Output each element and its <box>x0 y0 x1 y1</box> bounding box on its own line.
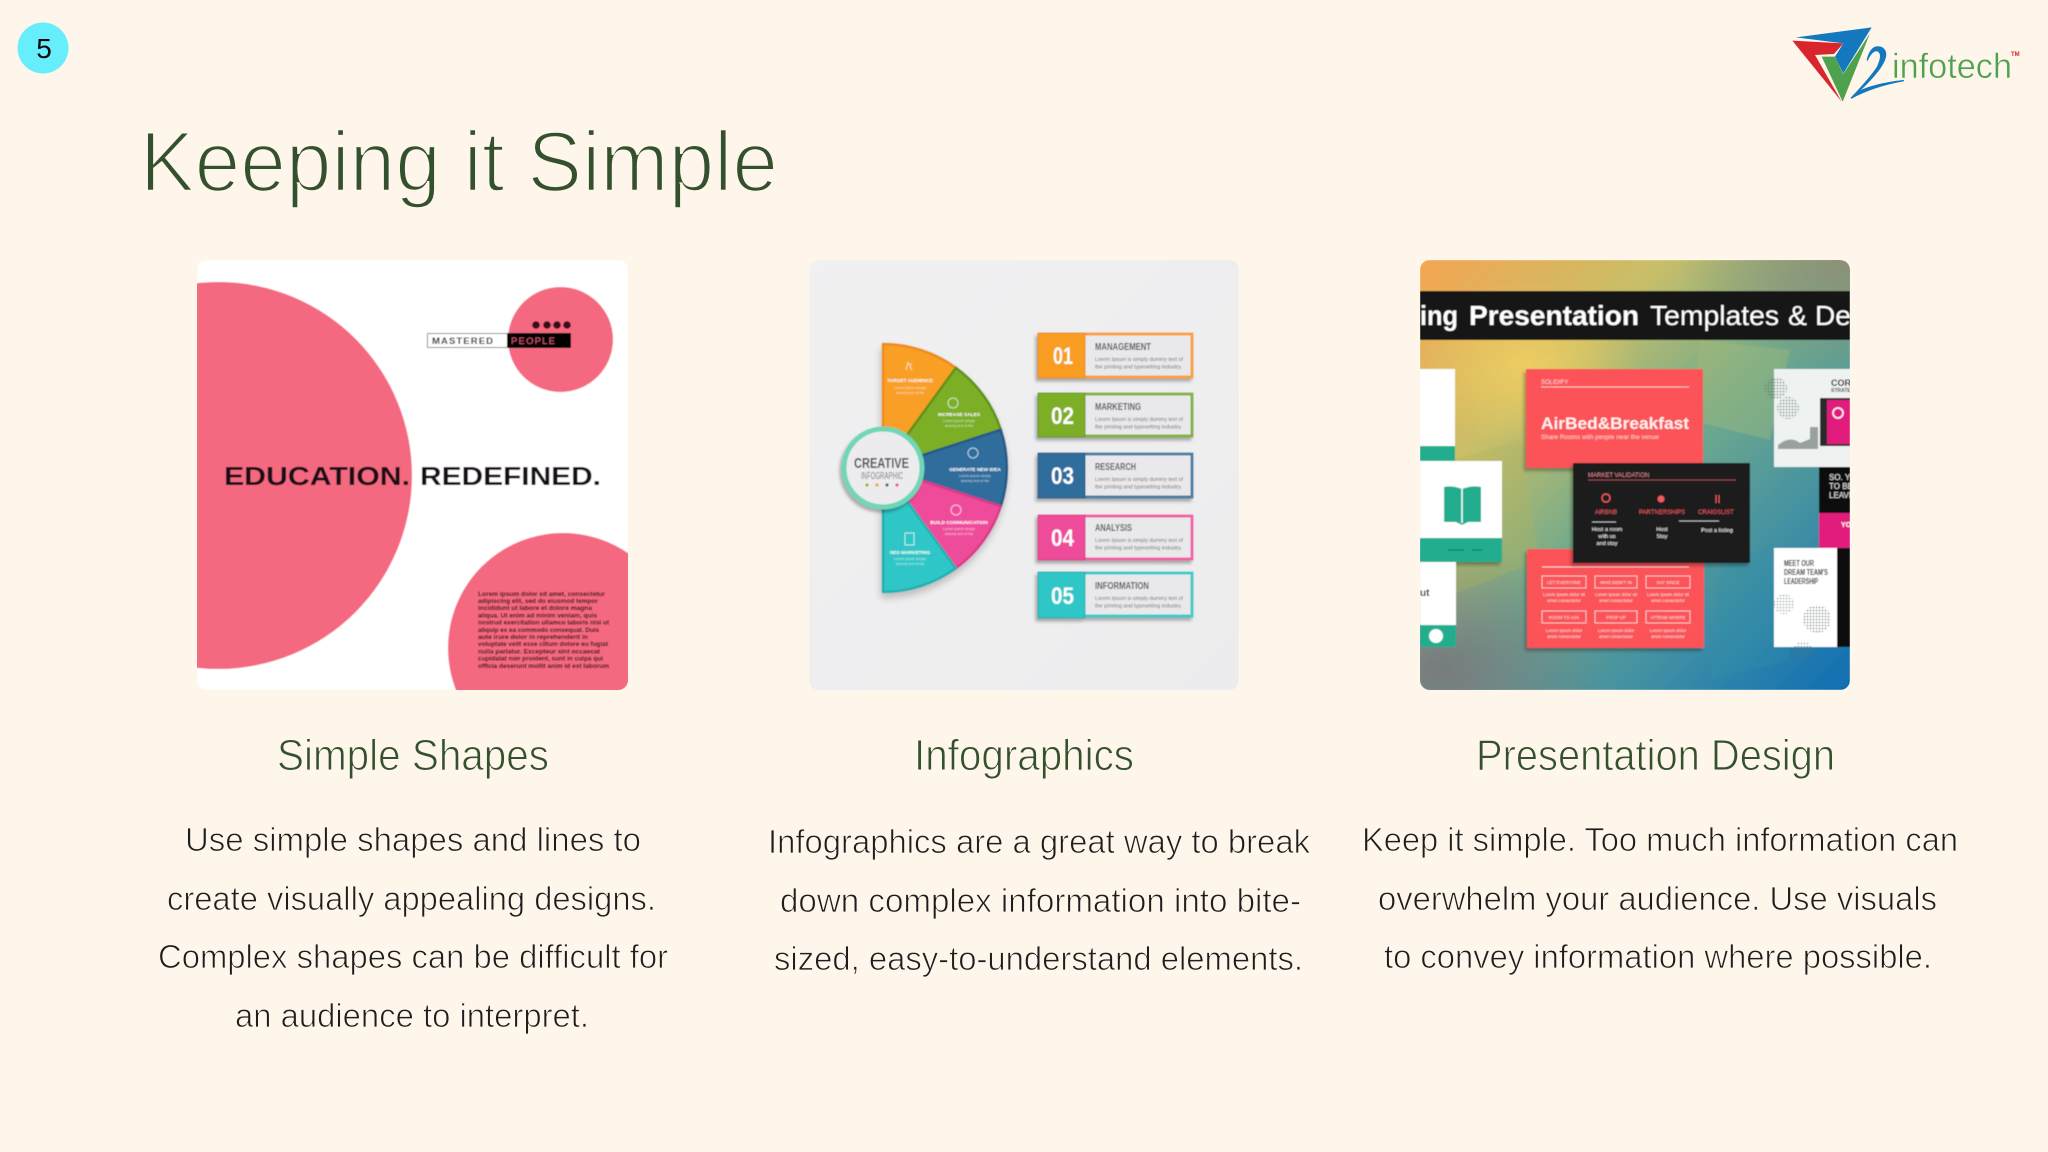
red slide: AirBed&Breakfast <box>1526 369 1703 468</box>
dark slide: market validation: and stay <box>1596 541 1618 547</box>
logo: V2infotech <box>1792 27 2020 102</box>
red slide: bottom: Lorem ipsum dolor <box>1598 628 1635 633</box>
brand label: mastered people: MASTERED <box>432 336 493 347</box>
text block: simple shapes description: Use simple shapes and lines to <box>185 821 641 858</box>
dark slide: market validation: AIRBNB <box>1595 510 1617 516</box>
wedge: pink: BUILD COMMUNICATION <box>930 520 988 526</box>
bottom right pink circle with lorem text: cupidatat non proident, sunt in culpa qui <box>478 656 603 662</box>
slide number badge: 5 <box>36 33 52 64</box>
wedge: green: Lorem ipsum simply <box>943 419 975 423</box>
red slide: bottom <box>1527 549 1704 648</box>
bottom right pink circle with lorem text: aute irure dolor in reprehenderit in <box>478 634 588 641</box>
text block: infographics description <box>768 823 1310 977</box>
text block: infographics description: Infographics are a great way to break <box>768 823 1310 860</box>
brand label: mastered people <box>428 333 571 348</box>
text block: presentation design description: Keep it simple. Too much information can <box>1362 821 1958 858</box>
wedge: orange: TARGET AUDIENCE <box>887 378 934 384</box>
card 04 analysis <box>1038 515 1192 560</box>
text block: simple shapes description <box>158 821 668 1034</box>
text block: presentation design description <box>1362 821 1958 975</box>
center hub: creative infographic: INFOGRAPHIC <box>861 471 903 482</box>
card 03 research: the printing and typesetting industry. <box>1095 484 1182 490</box>
wedge: pink: Lorem ipsum simply <box>943 527 975 531</box>
dark slide: market validation: Host <box>1656 527 1668 533</box>
right collage slides <box>1764 368 1850 659</box>
slide: magenta: YO <box>1841 522 1852 529</box>
slide number badge <box>18 22 68 74</box>
panel: presentation design image <box>1420 260 1850 690</box>
red slide: bottom: SAY SINCE <box>1656 580 1680 585</box>
dark slide: market validation: Post a listing <box>1701 528 1733 534</box>
wedge: teal: dummy text of the <box>896 562 924 566</box>
wedge: green <box>906 366 1003 454</box>
card 02 marketing: MARKETING <box>1095 401 1141 413</box>
red slide: bottom: Lorem ipsum dolor sit <box>1647 592 1690 597</box>
red slide: bottom: amet consectetur <box>1547 598 1581 603</box>
wedge: blue <box>922 428 1010 512</box>
dark slide: market validation: Host a room <box>1592 527 1623 533</box>
card 03 research: Lorem Ipsum is simply dummy text of <box>1095 477 1183 483</box>
text block: simple shapes description: create visually appealing designs. <box>167 880 656 917</box>
card 02 marketing: Lorem Ipsum is simply dummy text of <box>1095 417 1183 423</box>
dark slide: market validation <box>1573 463 1750 563</box>
bottom right pink circle with lorem text: voluptate velit esse cillum dolore eu fugiat <box>478 641 609 648</box>
bottom right pink circle with lorem text: officia deserunt mollit anim id est laborum <box>478 663 609 670</box>
slide: photo with dotted circles: STRATEGY <box>1831 388 1859 394</box>
radial wedge chart <box>883 344 1007 592</box>
card 01 management <box>1038 333 1192 378</box>
card 02 marketing: 02 <box>1051 403 1074 430</box>
headline: education redefined: EDUCATION. <box>224 461 410 491</box>
wedge: blue: dummy text of the <box>961 479 989 483</box>
text block: simple shapes description: Complex shapes can be difficult for <box>158 938 668 975</box>
slide: team leadership <box>1774 548 1850 659</box>
card 01 management: MANAGEMENT <box>1095 341 1151 353</box>
bottom right pink circle with lorem text: nulla pariatur. Excepteur sint occaecat <box>478 648 601 656</box>
wedge: teal <box>883 468 956 592</box>
card 03 research: RESEARCH <box>1095 461 1136 473</box>
wedge: teal: Lorem ipsum simply <box>894 557 926 561</box>
center hub: creative infographic: CREATIVE <box>854 455 909 472</box>
bottom right pink circle with lorem text: adipiscing elit, sed do eiusmod tempor <box>478 598 599 605</box>
red slide: bottom: Lorem ipsum dolor <box>1650 628 1687 633</box>
title: Keeping it Simple <box>140 115 778 210</box>
brand label: mastered people: PEOPLE <box>511 336 555 347</box>
social icons <box>532 321 571 329</box>
red slide: AirBed&Breakfast: AirBed&Breakfast <box>1541 414 1689 433</box>
card 02 marketing <box>1038 393 1192 437</box>
dark slide: market validation: Stay <box>1656 534 1668 540</box>
red slide: bottom: Lorem ipsum dolor sit <box>1543 592 1586 597</box>
bottom right pink circle with lorem text: aliqua. Ut enim ad minim veniam, quis <box>478 612 597 620</box>
slide: team leadership: LEADERSHIP <box>1784 577 1818 586</box>
red slide: AirBed&Breakfast: SOLIDIFY <box>1541 380 1568 386</box>
wedge: orange <box>877 342 957 434</box>
slide: book icon <box>1420 461 1502 562</box>
top right pink circle <box>508 287 613 392</box>
black title banner: ing <box>1420 300 1458 331</box>
slide: black quote: TO BE A <box>1829 482 1861 491</box>
wedge: pink: dummy text of the <box>945 532 973 536</box>
red slide: bottom: amet consectetur <box>1651 634 1685 639</box>
red slide: bottom: amet consectetur <box>1599 634 1633 639</box>
slide: teal top <box>1420 369 1455 468</box>
panel: infographic image <box>809 260 1239 690</box>
bottom right pink circle with lorem text: nostrud exercitation ullamco laboris nisi ut <box>478 620 610 626</box>
card 03 research <box>1038 453 1192 498</box>
card 05 information: INFORMATION <box>1095 580 1149 592</box>
red slide: bottom: LET EVERYONE <box>1547 580 1581 585</box>
wedge: green: dummy text of the <box>945 424 973 428</box>
slide: magenta <box>1818 512 1850 549</box>
card 05 information <box>1038 572 1192 618</box>
heading: infographics: Infographics <box>914 731 1134 780</box>
black title banner: Presentation <box>1469 300 1639 331</box>
panel: simple shapes image <box>197 260 628 690</box>
logo: V2infotech: infotech <box>1892 47 2012 86</box>
heading: presentation design: Presentation Design <box>1476 731 1835 780</box>
bottom right pink circle with lorem text: Lorem ipsum dolor sit amet, consectetur <box>478 591 606 598</box>
slide: photo with dotted circles <box>1765 369 1859 467</box>
red slide: bottom: amet consectetur <box>1547 634 1581 639</box>
black title banner <box>1420 291 1851 340</box>
slide: circle badge: ut <box>1420 588 1430 599</box>
center hub: creative infographic <box>844 429 922 507</box>
text block: presentation design description: to convey information where possible. <box>1384 938 1932 975</box>
wedge: teal: SEO MARKETING <box>890 550 931 556</box>
card 05 information: the printing and typesetting industry. <box>1095 604 1182 610</box>
text block: infographics description: sized, easy-to-understand elements. <box>774 940 1303 977</box>
wedge: orange: Lorem ipsum simply <box>894 386 926 390</box>
card 04 analysis: 04 <box>1051 525 1075 552</box>
red slide: bottom: amet consectetur <box>1599 598 1633 603</box>
card 04 analysis: ANALYSIS <box>1095 522 1132 534</box>
slide: circle badge <box>1420 562 1456 647</box>
black title banner: De <box>1815 300 1851 331</box>
black title banner: & <box>1788 300 1807 331</box>
dark slide: market validation: CRAIGSLIST <box>1698 510 1734 516</box>
red slide: bottom: ROOM TO ASK <box>1549 615 1579 620</box>
red slide: bottom: Lorem ipsum dolor <box>1546 628 1583 633</box>
wedge: pink <box>908 479 1003 576</box>
bottom right pink circle with lorem text <box>448 532 628 690</box>
wedge: blue: Lorem ipsum simply <box>959 474 991 478</box>
text block: infographics description: down complex information into bite- <box>780 882 1301 919</box>
slide: black quote <box>1818 466 1850 514</box>
dark slide: market validation: with us <box>1597 534 1616 540</box>
logo: V2infotech: TM <box>2011 52 2020 58</box>
red slide: bottom: amet consectetur <box>1651 598 1685 603</box>
red slide: bottom: WHO DIDN'T IN <box>1600 580 1632 585</box>
dark slide: market validation: PARTNERSHIPS <box>1639 510 1685 516</box>
headline: education redefined: REDEFINED. <box>420 461 601 491</box>
text block: simple shapes description: an audience to interpret. <box>235 997 589 1034</box>
card 01 management: the printing and typesetting industry. <box>1095 364 1182 370</box>
slide: black quote: SO. YOU <box>1829 473 1862 482</box>
card 04 analysis: the printing and typesetting industry. <box>1095 546 1182 552</box>
wedge: green: INCREASE SALES <box>938 412 981 418</box>
card 01 management: Lorem Ipsum is simply dummy text of <box>1095 357 1183 363</box>
slide: team leadership: MEET OUR <box>1784 559 1814 568</box>
text block: presentation design description: overwhelm your audience. Use visuals <box>1378 880 1937 917</box>
headline: education redefined <box>225 466 600 486</box>
slide: black quote: LEAVE I <box>1829 491 1859 500</box>
red slide: bottom: PROP UP <box>1606 615 1626 620</box>
heading: simple shapes: Simple Shapes <box>277 731 549 780</box>
red slide: AirBed&Breakfast: Share Rooms with people near the venue <box>1541 434 1659 441</box>
card 04 analysis: Lorem Ipsum is simply dummy text of <box>1095 538 1183 544</box>
card 01 management: 01 <box>1053 343 1073 370</box>
card 03 research: 03 <box>1051 463 1074 490</box>
bottom right pink circle with lorem text: aliquip ex ea commodo consequat. Duis <box>478 627 599 634</box>
black title banner: Templates <box>1650 300 1779 331</box>
bottom right pink circle with lorem text: incididunt ut labore et dolore magna <box>478 605 592 612</box>
red slide: bottom: Lorem ipsum dolor sit <box>1595 592 1638 597</box>
card 05 information: 05 <box>1051 583 1074 610</box>
dark slide: market validation: MARKET VALIDATION <box>1588 473 1649 479</box>
slide: team leadership: DREAM TEAM'S <box>1784 568 1828 577</box>
wedge: blue: GENERATE NEW IDEA <box>949 467 1001 473</box>
slide: photo with dotted circles: CORE <box>1831 378 1857 388</box>
large pink circle <box>197 282 412 670</box>
card 05 information: Lorem Ipsum is simply dummy text of <box>1095 596 1183 602</box>
left teal slides <box>1420 369 1502 647</box>
red slide: bottom: ATTEND WHERE <box>1651 615 1685 620</box>
wedge: orange: dummy text of the <box>896 391 924 395</box>
card 02 marketing: the printing and typesetting industry. <box>1095 424 1182 430</box>
